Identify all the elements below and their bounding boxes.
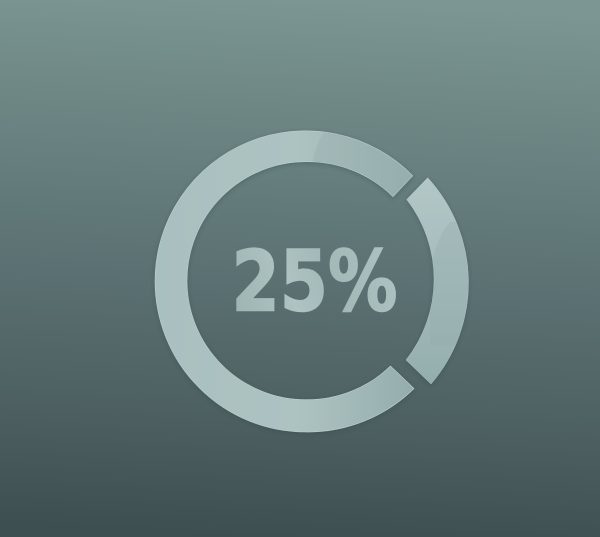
highlight: top glare	[314, 132, 412, 196]
percentage label: 25%	[232, 232, 398, 330]
ring segment: large 75% arc	[155, 131, 414, 432]
highlight: right glare	[432, 222, 468, 330]
ring segment: small 25% arc	[406, 178, 469, 384]
progress ring	[155, 125, 480, 432]
